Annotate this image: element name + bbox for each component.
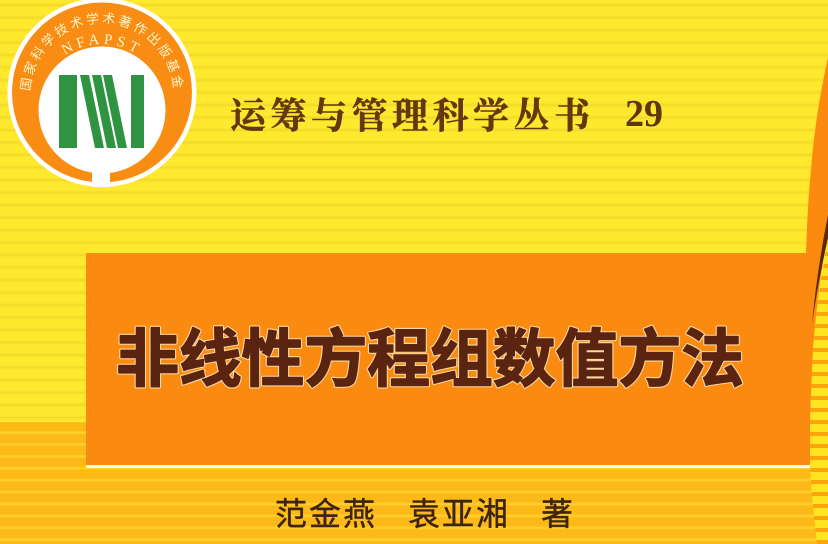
logo: orange ring <box>12 2 192 182</box>
panel: orange title block <box>86 253 810 465</box>
author credit: 著 <box>541 496 573 532</box>
logo: ring text NFAPST: NFAPST <box>60 34 140 55</box>
series heading: 运筹与管理科学丛书 <box>230 96 591 136</box>
title: 非线性方程组数值方法 <box>116 325 744 395</box>
author: Fan Jinyan: 范金燕 <box>275 496 375 532</box>
series number: 29 <box>625 93 663 135</box>
title: 非线性方程组数值方法 <box>116 325 744 395</box>
logo: ring text Chinese: 国家科学技术学术著作出版基金 <box>20 12 184 90</box>
authors <box>275 496 573 532</box>
right edge: dark brown curve <box>812 215 828 325</box>
right edge: striped yellow lower corner <box>810 240 828 544</box>
background: lower orange-yellow band <box>0 422 828 544</box>
logo: green books <box>59 75 144 148</box>
logo: fund emblem <box>8 0 196 187</box>
logo: white outer disc <box>8 0 196 187</box>
right edge: orange curved band <box>806 57 828 465</box>
logo: white stem at the bottom <box>92 165 110 187</box>
divider: white line below title block <box>86 465 810 468</box>
logo: white inner disc <box>38 46 166 174</box>
author: Yuan Yaxiang: 袁亚湘 <box>408 496 508 532</box>
